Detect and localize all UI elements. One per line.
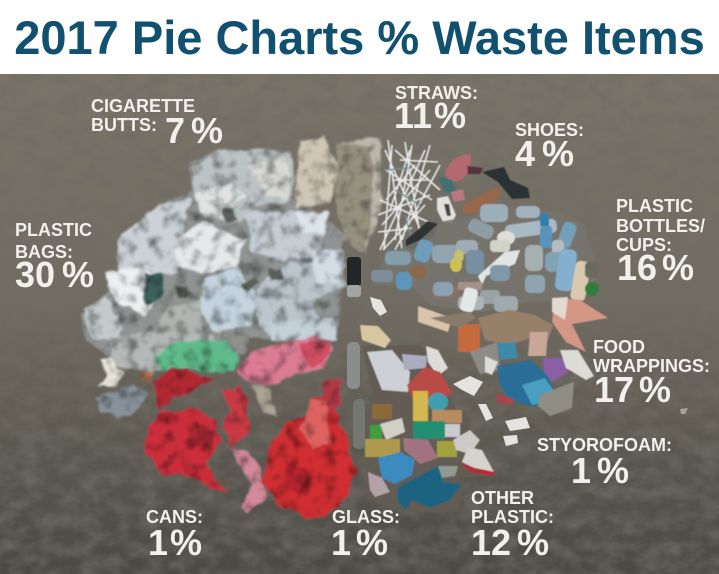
green bag [153, 339, 240, 374]
label: cigarette butts [91, 96, 223, 151]
label: cans: CANS: [146, 507, 203, 527]
label: plastic bags: BAGS: [15, 242, 73, 262]
label: other plastic: OTHER [471, 488, 534, 508]
styrofoam pieces [370, 297, 688, 446]
label: plastic bottles/cups: % [662, 247, 694, 288]
label: plastic bags: 30 [15, 254, 55, 295]
label: shoes: 4 [515, 133, 535, 174]
label: styrofoam [537, 435, 672, 491]
label: shoes [515, 120, 584, 174]
label: cigarette butts: CIGARETTE [91, 96, 195, 116]
shoes [406, 154, 530, 249]
label: food wrappings: % [639, 369, 671, 410]
label: plastic bags [15, 220, 94, 295]
label: shoes: % [542, 133, 574, 174]
label: shoes: SHOES: [515, 120, 584, 140]
label: straws [394, 83, 478, 136]
label: plastic bottles/cups [616, 196, 705, 288]
label: glass [331, 507, 400, 563]
label: plastic bags: PLASTIC [15, 220, 92, 240]
label: other plastic: % [517, 522, 549, 563]
label: glass: % [356, 522, 388, 563]
label: other plastic: PLASTIC: [471, 507, 554, 527]
label: other plastic [471, 488, 554, 563]
label: plastic bottles/cups: CUPS: [616, 235, 672, 255]
label: food wrappings: FOOD [593, 337, 645, 357]
title [0, 0, 719, 74]
red bags [147, 336, 357, 518]
label: styrofoam: % [597, 450, 629, 491]
can [347, 257, 361, 297]
label: plastic bottles/cups: BOTTLES/ [616, 216, 705, 236]
label: cigarette butts: % [191, 110, 223, 151]
straws [378, 140, 440, 250]
label: cigarette butts: BUTTS: [91, 115, 157, 135]
label: styrofoam: STYOROFOAM: [537, 435, 672, 455]
food wrappings [418, 297, 608, 416]
label: styrofoam: 1 [571, 450, 591, 491]
label: cans: % [170, 522, 202, 563]
label: other plastic: 12 [471, 522, 511, 563]
title: 2017 Pie Charts % Waste Items [14, 11, 705, 64]
other plastic [360, 325, 495, 512]
label: food wrappings: WRAPPINGS: [593, 356, 710, 376]
label: glass: GLASS: [332, 507, 400, 527]
label: straws: STRAWS: [395, 83, 478, 103]
label: straws: 11 [394, 95, 432, 136]
label: straws: % [434, 95, 466, 136]
label: food wrappings: 17 [594, 369, 634, 410]
label: food wrappings [593, 337, 710, 410]
label: plastic bottles/cups: PLASTIC [616, 196, 693, 216]
label: cans: 1 [148, 522, 168, 563]
label: glass: 1 [331, 522, 351, 563]
plastic bags pile [82, 138, 382, 419]
label: cigarette butts: 7 [165, 110, 185, 151]
glass bottles [347, 342, 365, 449]
label: cans [146, 507, 203, 563]
label: plastic bottles/cups: 16 [617, 247, 657, 288]
label: plastic bags: % [62, 254, 94, 295]
plastic bottles [371, 204, 600, 313]
